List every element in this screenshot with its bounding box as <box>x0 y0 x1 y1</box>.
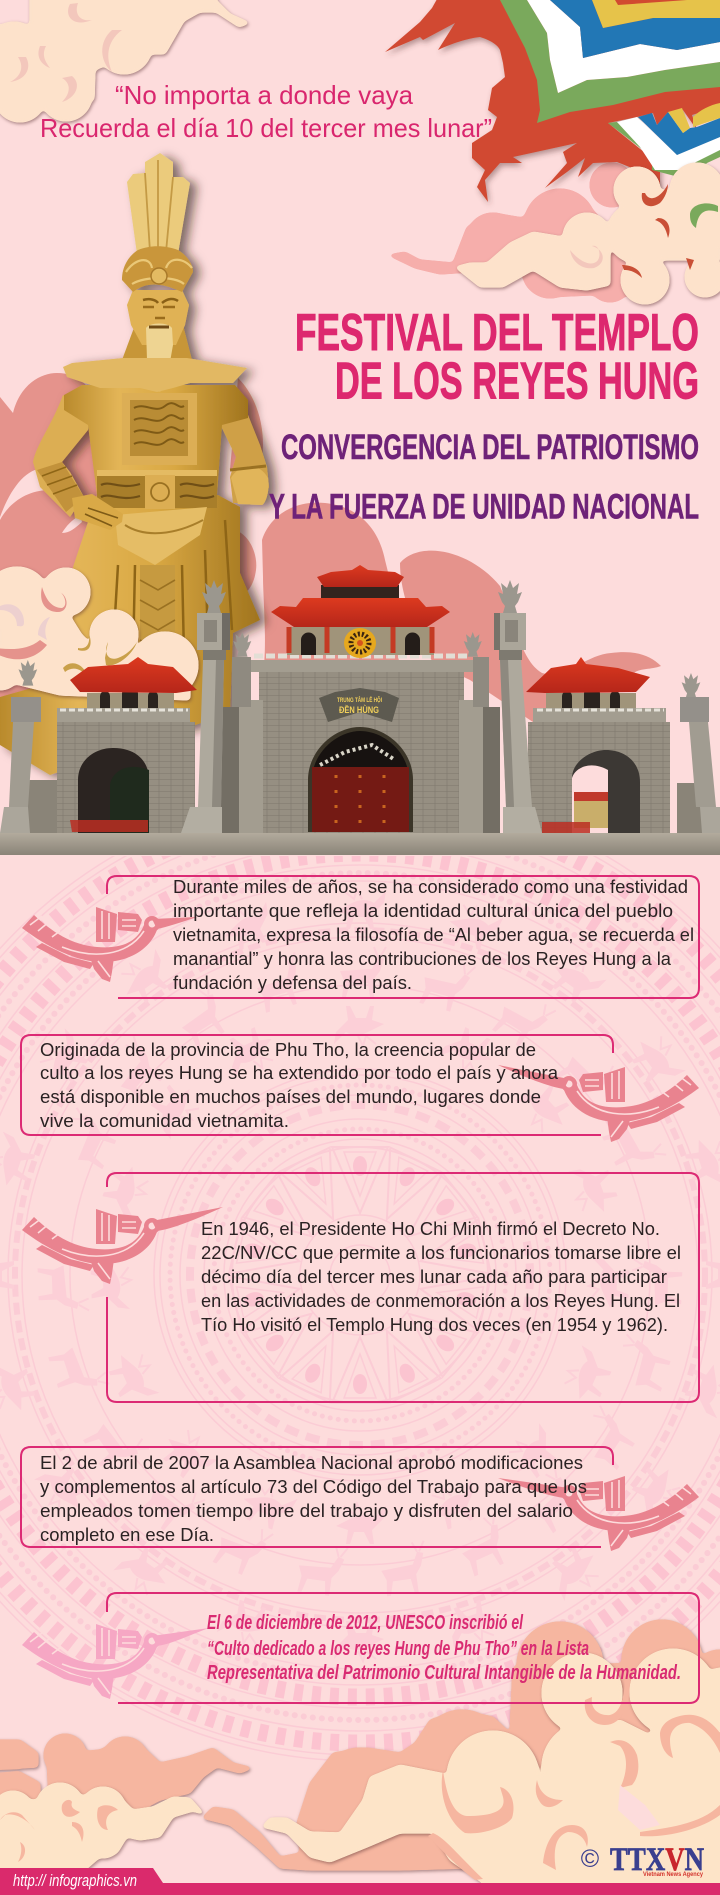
crown plumes <box>127 153 190 254</box>
icon: crane 4 <box>498 1476 699 1551</box>
panel 2 text: está disponible en muchos países del mundo, lugares donde <box>40 1086 541 1107</box>
footer bar <box>0 1868 720 1895</box>
panel 1 text: Durante miles de años, se ha considerado como una festividad <box>173 876 688 897</box>
panel 3 text: décimo día del tercer mes lunar cada año para participar <box>201 1266 667 1287</box>
flag upper stripes <box>500 0 720 123</box>
pale gap in right cloud <box>618 1785 660 1830</box>
right big pillar <box>494 580 542 833</box>
cloud front right <box>262 1649 720 1895</box>
outer right pillar <box>680 673 720 833</box>
cloud: left, over statue <box>0 567 198 700</box>
ground <box>0 833 720 855</box>
temple sign: TRUNG TÂM LỄ HỘI <box>337 696 382 704</box>
flag lower stripes <box>608 103 720 180</box>
panel 1 text: vietnamita, expresa la filosofía de “Al beber agua, se recuerda el <box>173 924 694 945</box>
left big pillar <box>181 580 230 833</box>
shoulders <box>63 358 247 392</box>
left arm <box>33 395 90 517</box>
dark pink cloud behind statue and temple <box>0 373 661 730</box>
panel 5 frame <box>107 1593 699 1703</box>
panel 4 text <box>40 1452 587 1545</box>
icon: crane 2 <box>498 1065 699 1142</box>
panel 1 text: manantial” y honra las contribuciones de los Reyes Hung a la <box>173 948 672 969</box>
panel 5 text <box>207 1612 681 1684</box>
light swoosh inside left cloud <box>0 468 82 533</box>
neck and head <box>122 246 193 392</box>
logo tagline: Vietnam News Agency <box>643 1871 703 1878</box>
cloud: bottom front layer <box>0 1649 720 1895</box>
light pink cloud behind top-right cloud <box>388 163 640 302</box>
panel 4 text: empleados tomen tiempo libre del trabajo y disfruten del salario <box>40 1500 573 1521</box>
panel 2 text <box>40 1039 559 1131</box>
panel 4 text: y complementos al artículo 73 del Código del Trabajo para que los <box>40 1476 587 1497</box>
logo wordmark: TTXVN <box>610 1842 704 1878</box>
website url: http:// infographics.vn <box>13 1871 137 1890</box>
torso <box>64 385 248 495</box>
panel 3 text <box>201 1218 681 1335</box>
panel 2 frame <box>21 1035 613 1135</box>
central arch and red door <box>308 727 413 832</box>
top-left cloud swirls <box>10 3 122 102</box>
back walls <box>18 707 702 833</box>
cloud back right <box>202 1620 720 1870</box>
cloud: top-right <box>455 163 720 304</box>
skirt <box>0 495 260 775</box>
right wing building <box>526 657 670 833</box>
panel 3 text: 22C/NV/CC que permite a los funcionarios tomarse libre el <box>201 1242 681 1263</box>
panel 4: labour code <box>21 1447 699 1551</box>
panel 4 text: completo en ese Día. <box>40 1524 214 1545</box>
cloud back left <box>0 1734 253 1830</box>
panel 2 text: culto a los reyes Hung se ha extendido por todo el país y ahora <box>40 1062 559 1083</box>
quote <box>40 80 492 143</box>
panel 3: Ho Chi Minh decree <box>22 1173 699 1402</box>
panel 1 text <box>173 876 694 993</box>
central pavilion <box>271 565 450 658</box>
main gate wall <box>239 656 483 833</box>
temple gate <box>0 565 720 855</box>
panel 2 text: vive la comunidad vietnamita. <box>40 1110 289 1131</box>
top-right cloud swirls <box>622 184 694 278</box>
cloud front left <box>0 1783 205 1876</box>
quote line 1: “No importa a donde vaya <box>115 80 414 110</box>
icon: crane 3 <box>22 1207 223 1284</box>
quote line 2: Recuerda el día 10 del tercer mes lunar” <box>40 113 492 143</box>
cloud: bottom back layer <box>0 1620 720 1870</box>
panel 1: cultural identity <box>22 876 699 998</box>
chest plate and belt <box>97 393 217 565</box>
panel 2: origin in Phu Tho <box>21 1035 699 1142</box>
left cloud swirls <box>0 587 67 659</box>
panel 1 text: importante que refleja la identidad cultural única del pueblo <box>173 900 673 921</box>
cloud: top-left <box>0 0 250 122</box>
skirt folds <box>110 520 232 710</box>
title <box>269 304 699 526</box>
outer left pillar <box>0 660 41 833</box>
bracers and hands <box>37 462 269 530</box>
panel 3 text: En 1946, el Presidente Ho Chi Minh firmó el Decreto No. <box>201 1218 660 1239</box>
flag: top-right decorative banner <box>385 0 720 202</box>
panel 3 text: en las actividades de conmemoración a los Reyes Hung. El <box>201 1290 680 1311</box>
statue of the Hung King <box>0 153 269 775</box>
panel 1 frame <box>107 876 699 998</box>
panel 4 frame <box>21 1447 613 1547</box>
copyright symbol: © <box>581 1845 600 1873</box>
temple sign: ĐỀN HÙNG <box>339 704 379 715</box>
logo: TTXVN <box>581 1842 704 1878</box>
panel 3 text: Tío Ho visitó el Templo Hung dos veces (en 1954 y 1962). <box>201 1314 668 1335</box>
bronze drum background pattern <box>0 789 720 1761</box>
panel 5: UNESCO recognition <box>22 1593 699 1703</box>
panel 5 text: El 6 de diciembre de 2012, UNESCO inscribió el <box>207 1612 523 1634</box>
panel 4 text: El 2 de abril de 2007 la Asamblea Nacional aprobó modificaciones <box>40 1452 583 1473</box>
cloud swirls <box>0 1680 720 1880</box>
icon: crane 5 <box>22 1624 209 1699</box>
temple sign <box>319 688 399 722</box>
flag red fringe <box>385 0 720 202</box>
icon: crane 1 <box>22 907 197 982</box>
panel 3 frame <box>107 1173 699 1402</box>
left wing building <box>57 657 197 833</box>
inner pillars <box>232 632 489 707</box>
panel 1 text: fundación y defensa del país. <box>173 972 412 993</box>
right arm <box>218 410 269 503</box>
panel 2 text: Originada de la provincia de Phu Tho, la creencia popular de <box>40 1039 536 1060</box>
